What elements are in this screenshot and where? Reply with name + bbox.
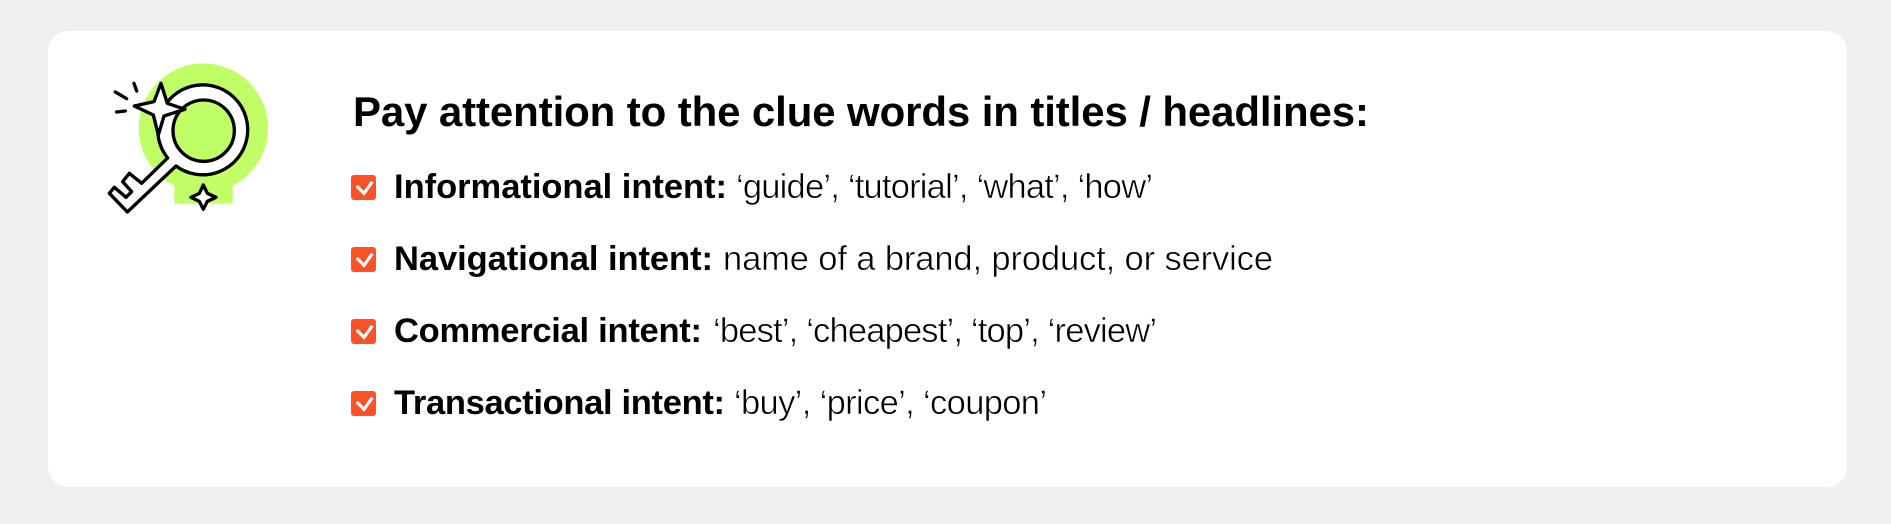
icon: small sparkle — [191, 185, 216, 209]
label: Navigational intent: — [394, 240, 713, 278]
icon: green blob background — [139, 63, 268, 204]
icon: key with sparkles — [109, 63, 268, 212]
label: Informational intent: — [394, 168, 727, 206]
keywords: name of a brand, product, or service — [723, 240, 1273, 278]
icon: spark dashes — [115, 83, 137, 112]
keywords: ‘buy’, ‘price’, ‘coupon’ — [734, 384, 1047, 422]
label: Commercial intent: — [394, 312, 702, 350]
icon: large sparkle — [134, 83, 185, 135]
list item: navigational intent — [351, 240, 1273, 278]
icon: checkbox — [351, 391, 376, 416]
keywords: ‘guide’, ‘tutorial’, ‘what’, ‘how’ — [736, 168, 1153, 206]
label: Transactional intent: — [394, 384, 725, 422]
list item: transactional intent — [351, 384, 1047, 422]
icon: checkbox — [351, 247, 376, 272]
icon: checkbox — [351, 175, 376, 200]
icon: key outline — [109, 85, 248, 212]
icon: checkbox — [351, 319, 376, 344]
list item: informational intent — [351, 168, 1153, 206]
icon: key ring hole — [173, 100, 234, 161]
keywords: ‘best’, ‘cheapest’, ‘top’, ‘review’ — [713, 312, 1157, 350]
list item: commercial intent — [351, 312, 1157, 350]
heading: Pay attention to the clue words in titles / headlines: — [353, 88, 1369, 135]
